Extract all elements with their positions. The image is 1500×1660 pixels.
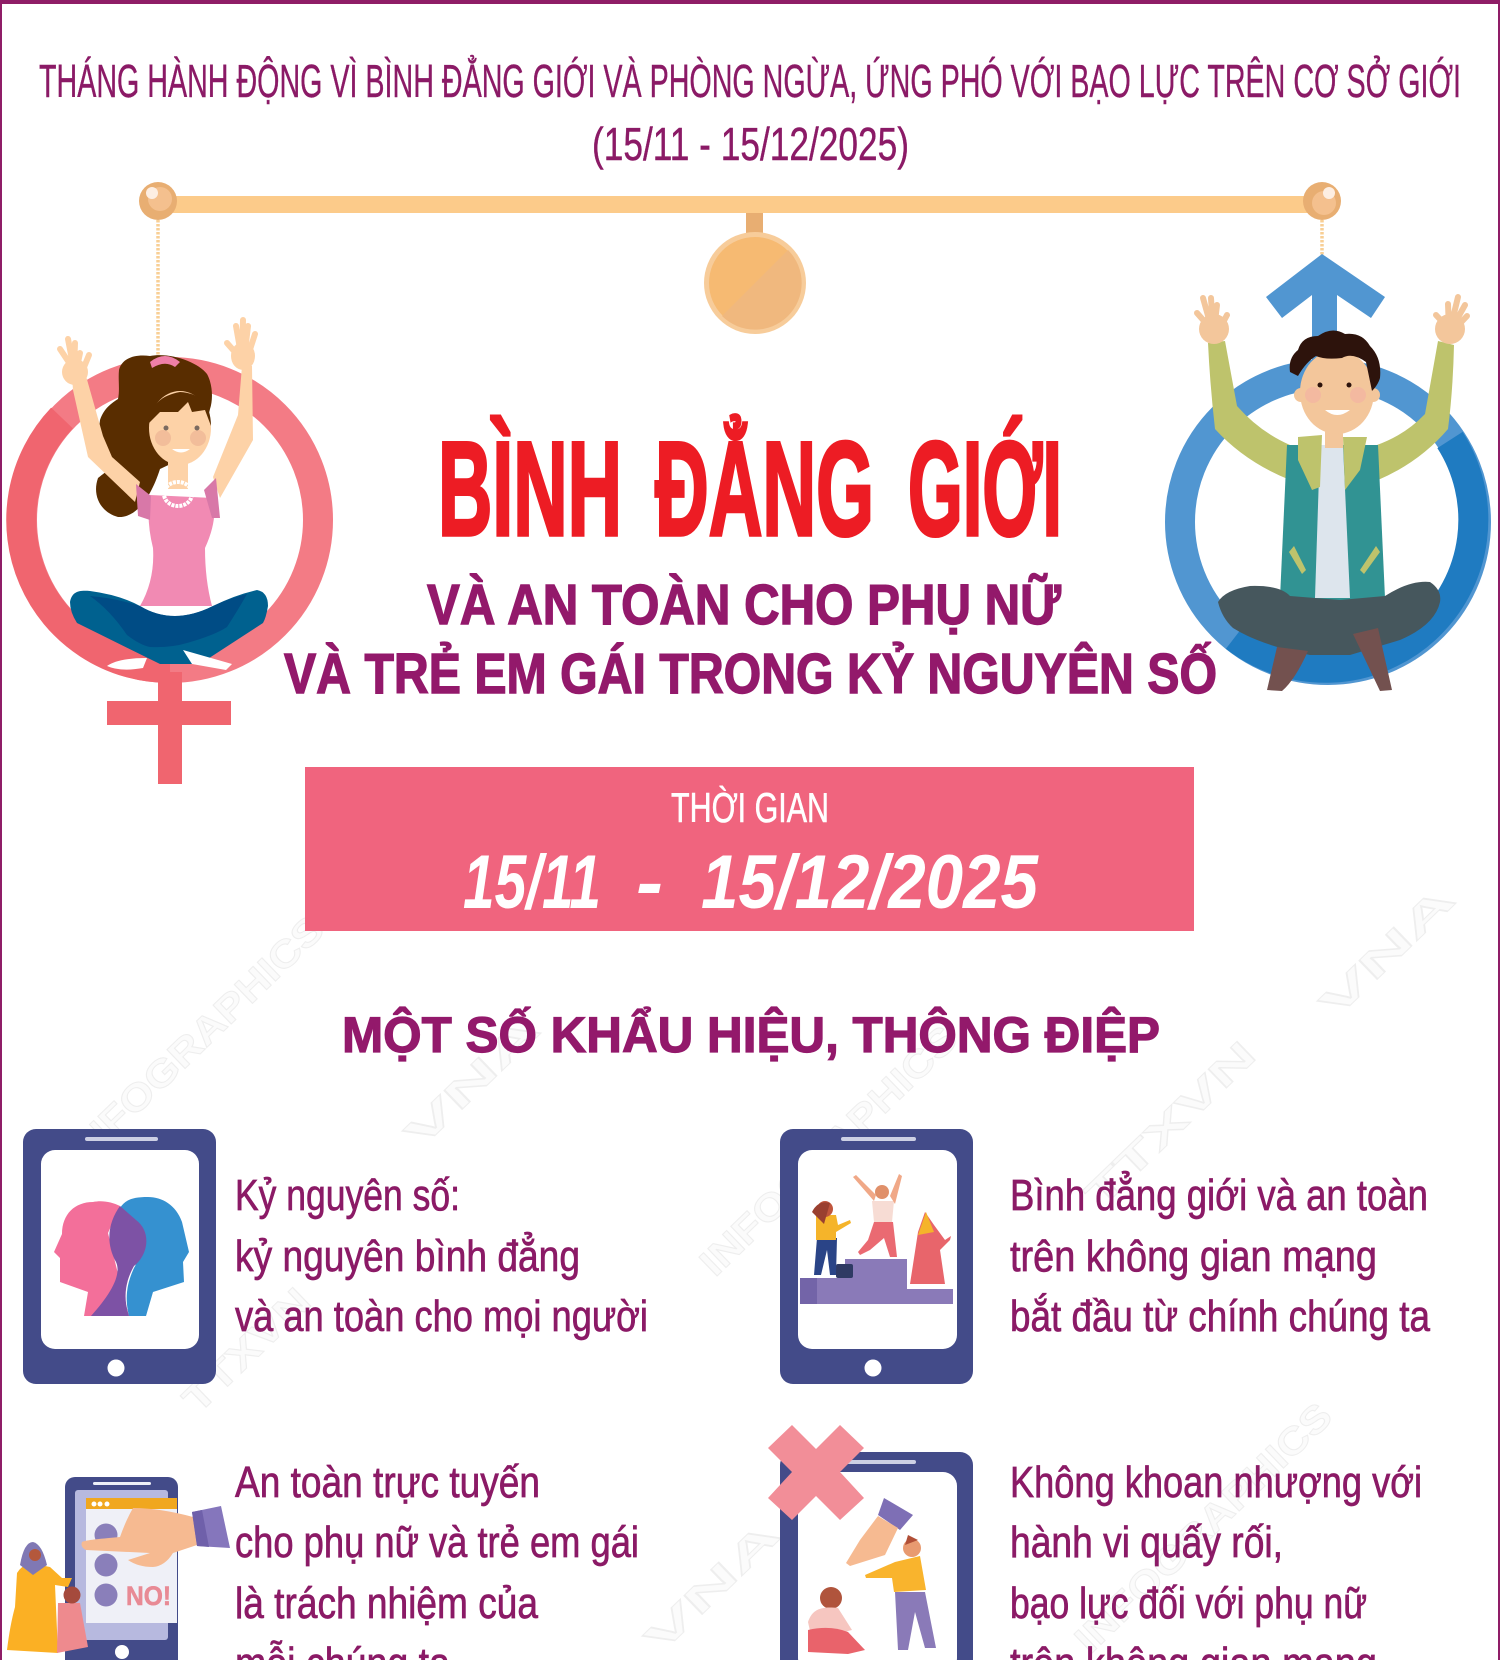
message 1 text: Kỷ nguyên số: <box>235 1171 460 1220</box>
message 3 text: An toàn trực tuyến <box>235 1458 540 1507</box>
header text: (15/11 - 15/12/2025) <box>592 118 909 170</box>
header text <box>39 55 1461 170</box>
time banner: 15/12/2025 <box>701 840 1040 925</box>
message 3 text <box>235 1458 639 1660</box>
female symbol <box>21 372 318 784</box>
message 1 text <box>235 1171 648 1341</box>
watermarks: TTXVN <box>1077 1033 1265 1216</box>
section heading: MỘT SỐ KHẨU HIỆU, THÔNG ĐIỆP <box>342 1006 1160 1063</box>
time banner: - <box>636 840 663 925</box>
subtitle <box>284 573 1217 706</box>
message 1 text: kỷ nguyên bình đẳng <box>235 1230 580 1281</box>
watermarks: VNA <box>397 1008 549 1156</box>
main title: GIỚI <box>908 415 1062 564</box>
message 2 icon: phone with podium <box>780 1129 973 1384</box>
message 2 text <box>1010 1169 1430 1341</box>
watermarks: VNA <box>637 1513 789 1660</box>
watermarks <box>59 878 1464 1660</box>
time banner: 15/11 <box>463 840 601 925</box>
message 3 icon: phone with hand and NO: NO! <box>126 1581 171 1611</box>
message 2 text: bắt đầu từ chính chúng ta <box>1010 1292 1430 1341</box>
watermarks: VNA <box>1312 878 1464 1026</box>
message 3 icon: phone with hand and NO <box>7 1477 230 1660</box>
message 4 icon: phone with cross and figures <box>768 1425 973 1660</box>
message 3 text: cho phụ nữ và trẻ em gái <box>235 1518 639 1567</box>
subtitle: VÀ AN TOÀN CHO PHỤ NỮ <box>427 573 1062 637</box>
watermarks: TTXVN <box>175 1280 319 1421</box>
main title <box>438 414 1062 564</box>
message 4 text <box>1010 1458 1422 1660</box>
message 2 text: Bình đẳng giới và an toàn <box>1010 1169 1428 1220</box>
watermarks: INFOGRAPHICS <box>59 908 333 1174</box>
watermarks: INFOGRAPHICS <box>1067 1395 1341 1660</box>
male symbol <box>1180 254 1476 670</box>
message 1 icon: phone with heads <box>23 1129 216 1384</box>
boy character <box>1197 297 1467 691</box>
girl character <box>60 320 268 670</box>
balance scale <box>139 182 1341 360</box>
message 2 text: trên không gian mạng <box>1010 1232 1377 1281</box>
main title: BÌNH <box>438 415 622 564</box>
time banner: THỜI GIAN <box>671 784 829 831</box>
message 4 text: Không khoan nhượng với <box>1010 1458 1422 1507</box>
message 4 text: bạo lực đối với phụ nữ <box>1010 1579 1367 1628</box>
watermarks: INFOGRAPHICS <box>692 1018 966 1284</box>
message 3 text: là trách nhiệm của <box>235 1579 538 1628</box>
message 1 text: và an toàn cho mọi người <box>235 1292 648 1341</box>
main title: ĐẲNG <box>655 414 874 564</box>
message 4 text: hành vi quấy rối, <box>1010 1518 1283 1567</box>
subtitle: VÀ TRẺ EM GÁI TRONG KỶ NGUYÊN SỐ <box>284 641 1217 706</box>
time banner <box>305 767 1194 931</box>
